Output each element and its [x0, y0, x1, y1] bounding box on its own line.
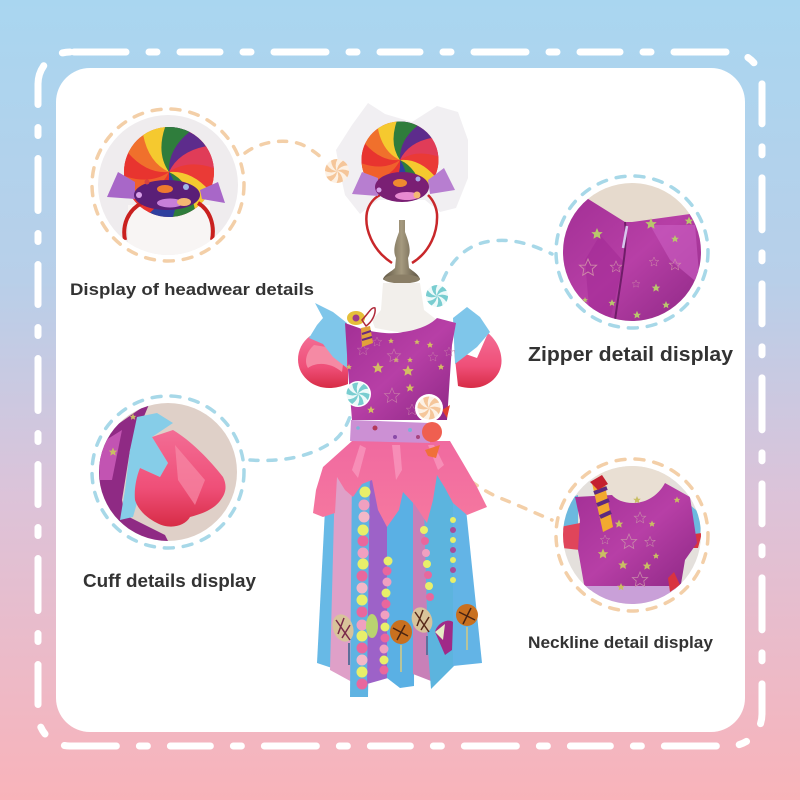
headband with candy — [336, 103, 468, 263]
shoulder candy bow — [347, 308, 375, 347]
connector: headwear — [245, 141, 326, 162]
lollipop: peach bodice — [415, 394, 443, 422]
right wrapper wing — [428, 168, 455, 194]
left sleeve — [298, 303, 348, 388]
label: zipper: Zipper detail display — [528, 344, 734, 366]
skirt — [317, 470, 482, 697]
connector: zipper — [443, 240, 552, 280]
connector: cuff — [250, 414, 351, 460]
detail circle: zipper — [556, 176, 708, 328]
white content panel — [56, 68, 745, 732]
peplum — [313, 441, 487, 527]
bodice — [345, 318, 456, 420]
label: headwear: Display of headwear details — [70, 280, 314, 299]
lollipop: blue top — [426, 284, 448, 308]
right sleeve — [453, 307, 502, 388]
connector: neckline — [443, 458, 552, 520]
lollipop: peach top — [325, 157, 349, 185]
detail circle: cuff — [92, 396, 244, 548]
label: cuff: Cuff details display — [83, 571, 256, 591]
label: neckline: Neckline detail display — [528, 634, 714, 652]
puff — [298, 336, 348, 388]
skirt candy motifs — [329, 604, 478, 672]
ruffle — [453, 307, 490, 364]
waistband — [350, 420, 430, 443]
rainbow swirl disc — [357, 117, 443, 203]
detail circle: headwear — [92, 109, 244, 261]
waist candy bow — [422, 405, 450, 458]
lollipop: blue bodice — [345, 381, 371, 407]
dashed outer border — [38, 52, 762, 746]
candy wrapper — [375, 172, 429, 202]
tulle veil — [336, 103, 468, 214]
ruffle — [309, 303, 347, 368]
detail circle: neckline — [556, 459, 708, 611]
red hairband — [366, 195, 437, 263]
left wrapper wing — [352, 172, 378, 196]
bead trims — [356, 486, 456, 690]
mannequin stand — [372, 220, 437, 333]
puff — [454, 333, 502, 388]
